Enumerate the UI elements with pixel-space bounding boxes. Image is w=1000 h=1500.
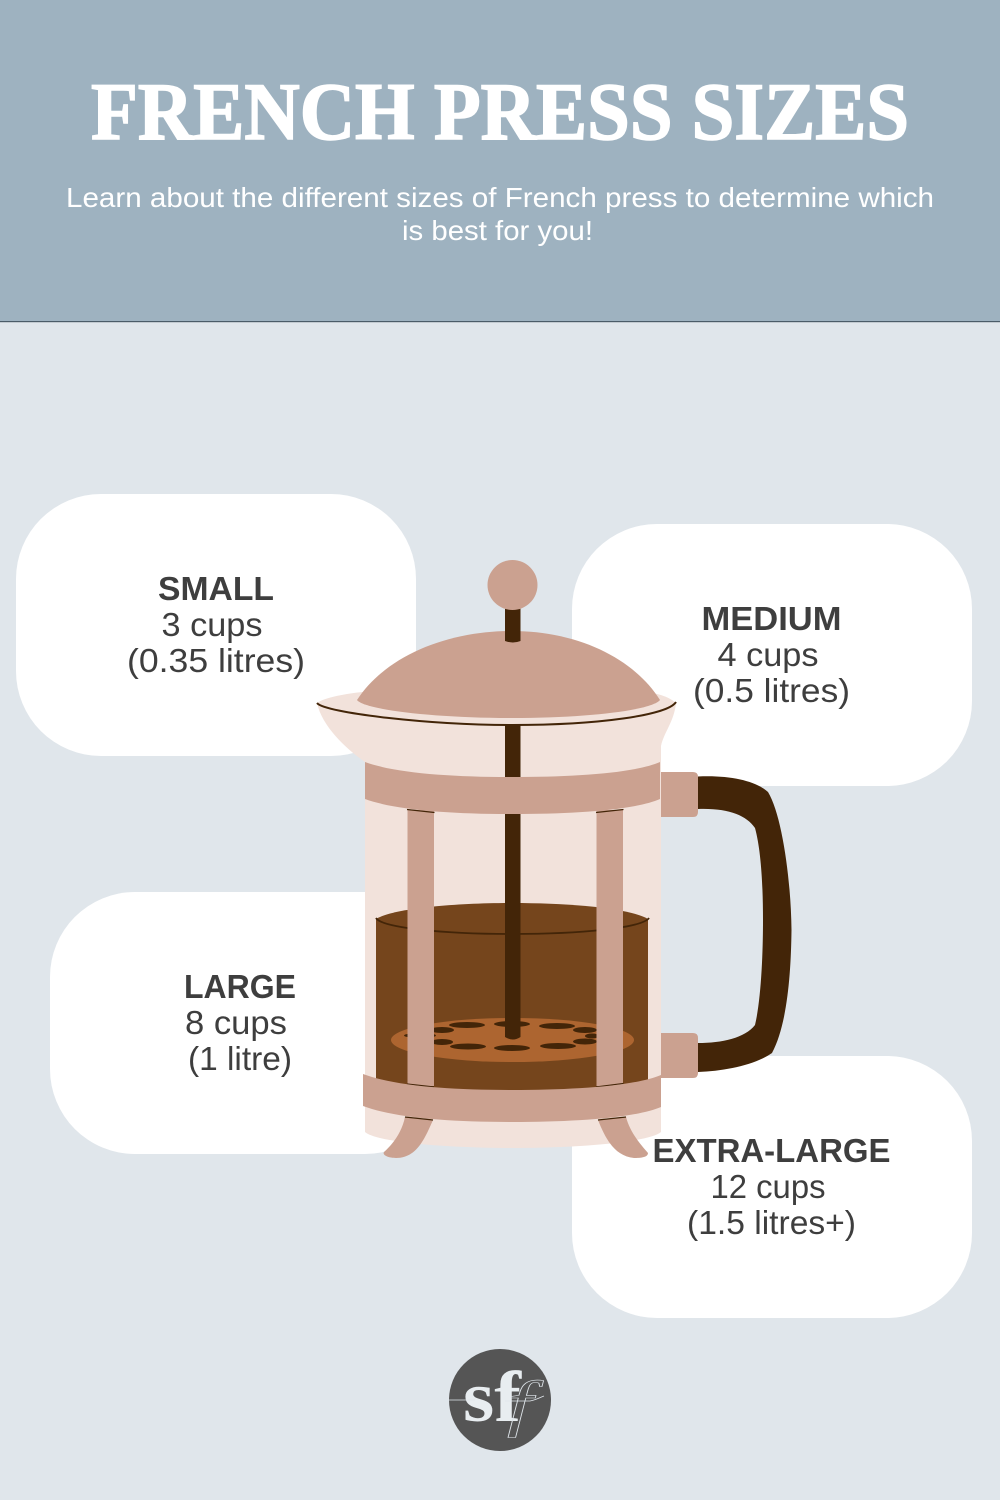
rim line: [317, 702, 676, 725]
header banner: [0, 0, 1000, 322]
panel: extra-large size: (1.5 litres+): [687, 1204, 856, 1241]
subtitle: [66, 182, 934, 246]
panel: small size: [16, 494, 416, 756]
panel: large size: 8 cups: [185, 1004, 287, 1041]
post details: [407, 810, 624, 1087]
panel: extra-large size: EXTRA-LARGE: [652, 1132, 890, 1169]
title: FRENCH PRESS SIZES: [91, 66, 909, 157]
panel: large size: [50, 892, 450, 1154]
rod through rim: [505, 724, 520, 780]
feet: [384, 1117, 648, 1158]
foot joints: [405, 1117, 626, 1120]
panel: large size: LARGE: [184, 968, 296, 1005]
handle connectors: [660, 772, 698, 1078]
logo: [449, 1349, 551, 1451]
panel: extra-large size: [572, 1056, 972, 1318]
illustration: french press: [317, 560, 792, 1158]
glass body: [365, 760, 661, 1148]
handle: [698, 776, 792, 1072]
knob: [488, 560, 538, 610]
vertical frame posts: [408, 810, 623, 1086]
plunger rod: [505, 720, 520, 1040]
subtitle: Learn about the different sizes of French press to determine which: [66, 182, 934, 213]
panel: small size: SMALL: [158, 570, 274, 607]
panel: medium size: [572, 524, 972, 786]
knob stem: [505, 605, 520, 642]
subtitle: is best for you!: [402, 215, 593, 246]
panel: medium size: 4 cups: [718, 636, 818, 673]
lower band: [363, 1074, 661, 1122]
panel: large size: (1 litre): [188, 1040, 292, 1077]
upper band: [365, 762, 660, 814]
lid: [357, 631, 660, 718]
panel: medium size: MEDIUM: [702, 600, 842, 637]
panel: small size: (0.35 litres): [127, 642, 305, 679]
coffee: [376, 903, 649, 1094]
logo: sf: [463, 1357, 522, 1437]
plunger plate: [391, 1018, 634, 1062]
cup top rim: [317, 686, 676, 768]
logo: f: [507, 1370, 545, 1438]
panel: small size: 3 cups: [162, 606, 262, 643]
panel: medium size: (0.5 litres): [693, 672, 850, 709]
panel: extra-large size: 12 cups: [710, 1168, 826, 1205]
